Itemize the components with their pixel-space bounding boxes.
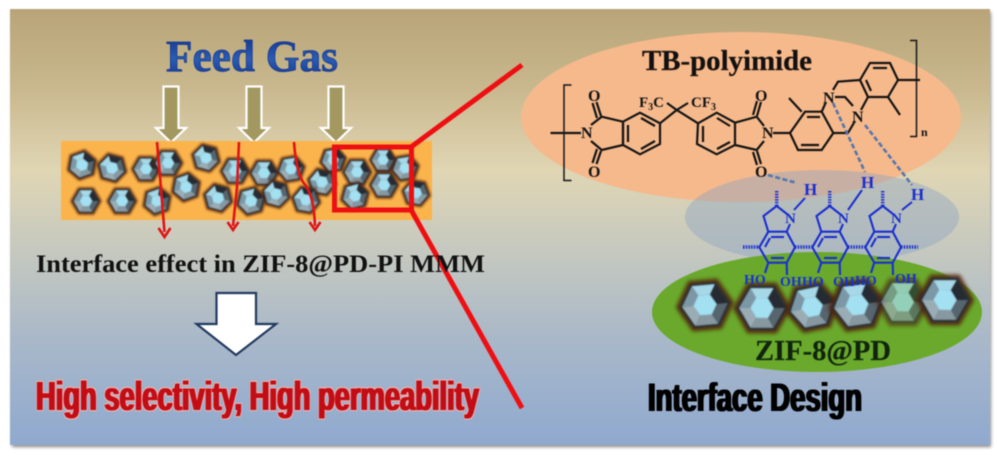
chemical structure: TB-polyimide: [550, 40, 928, 181]
permeation paths: [157, 142, 320, 237]
hydrogen bonds: [768, 103, 912, 185]
atom labels: H: [861, 173, 874, 192]
atom labels: OH: [833, 275, 855, 290]
red zoom box and lines: [334, 65, 522, 408]
atom labels: O: [588, 164, 600, 181]
atom labels: H: [804, 180, 817, 199]
atom labels: N: [838, 211, 849, 227]
arrow: path 2: [228, 142, 239, 230]
atom labels: 3: [711, 102, 716, 113]
feed arrows: [156, 86, 351, 142]
arrow: feed 3: [321, 86, 351, 142]
ellipse: polymer: [521, 32, 961, 202]
arrow: path 1: [157, 142, 170, 237]
atom labels: F: [639, 95, 648, 111]
N-H bonds: [794, 190, 912, 210]
atom labels: HO: [744, 273, 766, 288]
ZIF-8 crystals large: [670, 262, 982, 346]
CF3 bridge: [660, 110, 698, 123]
atom labels: H: [911, 185, 924, 204]
zoom line upper: [411, 65, 522, 147]
zoom line lower: [410, 208, 522, 408]
atom labels: O: [755, 164, 767, 181]
Troger's base: [789, 63, 920, 150]
membrane band: [61, 141, 432, 220]
atom labels: O: [588, 88, 600, 105]
atom labels: O: [755, 88, 767, 105]
arrow: path 3: [294, 142, 320, 230]
arrow: feed 2: [239, 86, 269, 142]
ellipse: ZIF-8@PD: [652, 252, 982, 372]
label: Interface Design: Interface Design: [648, 376, 862, 420]
atom labels: 3: [648, 102, 653, 113]
membrane with ZIF-8 particles: [61, 139, 434, 221]
atom labels: HO: [855, 274, 877, 289]
right imide and benzene: [697, 101, 790, 165]
heading: TB-polyimide: TB-polyimide: [642, 45, 812, 77]
atom labels: [581, 88, 928, 181]
atom labels: OH: [780, 275, 802, 290]
title: Feed Gas: Feed Gas: [166, 32, 338, 81]
atom labels: N: [823, 90, 835, 107]
atom labels: HO: [802, 275, 824, 290]
atom labels: [744, 173, 924, 290]
ellipse: interface zone: [685, 170, 959, 264]
repeat units: [743, 190, 918, 275]
result text: High selectivity, High permeability: [36, 373, 479, 419]
left imide and benzene: [550, 102, 660, 164]
atom labels: n: [921, 125, 928, 139]
atom labels: N: [852, 109, 864, 126]
chemical structure: polydopamine: [743, 173, 924, 290]
atom labels: N: [581, 125, 593, 142]
arrow: feed 1: [156, 86, 186, 142]
atom labels: N: [762, 125, 774, 142]
atom labels: CF: [691, 95, 711, 111]
atom labels: OH: [895, 272, 917, 287]
label: ZIF-8@PD: ZIF-8@PD: [755, 336, 891, 367]
zoom box: [334, 147, 412, 210]
particles: [65, 139, 434, 221]
caption: interface effect: Interface effect in ZIF-8@PD-PI MMM: [36, 251, 485, 278]
brackets: [564, 40, 916, 180]
arrow: result: [196, 293, 276, 355]
atom labels: N: [891, 211, 902, 227]
atom labels: N: [785, 211, 796, 227]
atom labels: C: [653, 95, 664, 111]
